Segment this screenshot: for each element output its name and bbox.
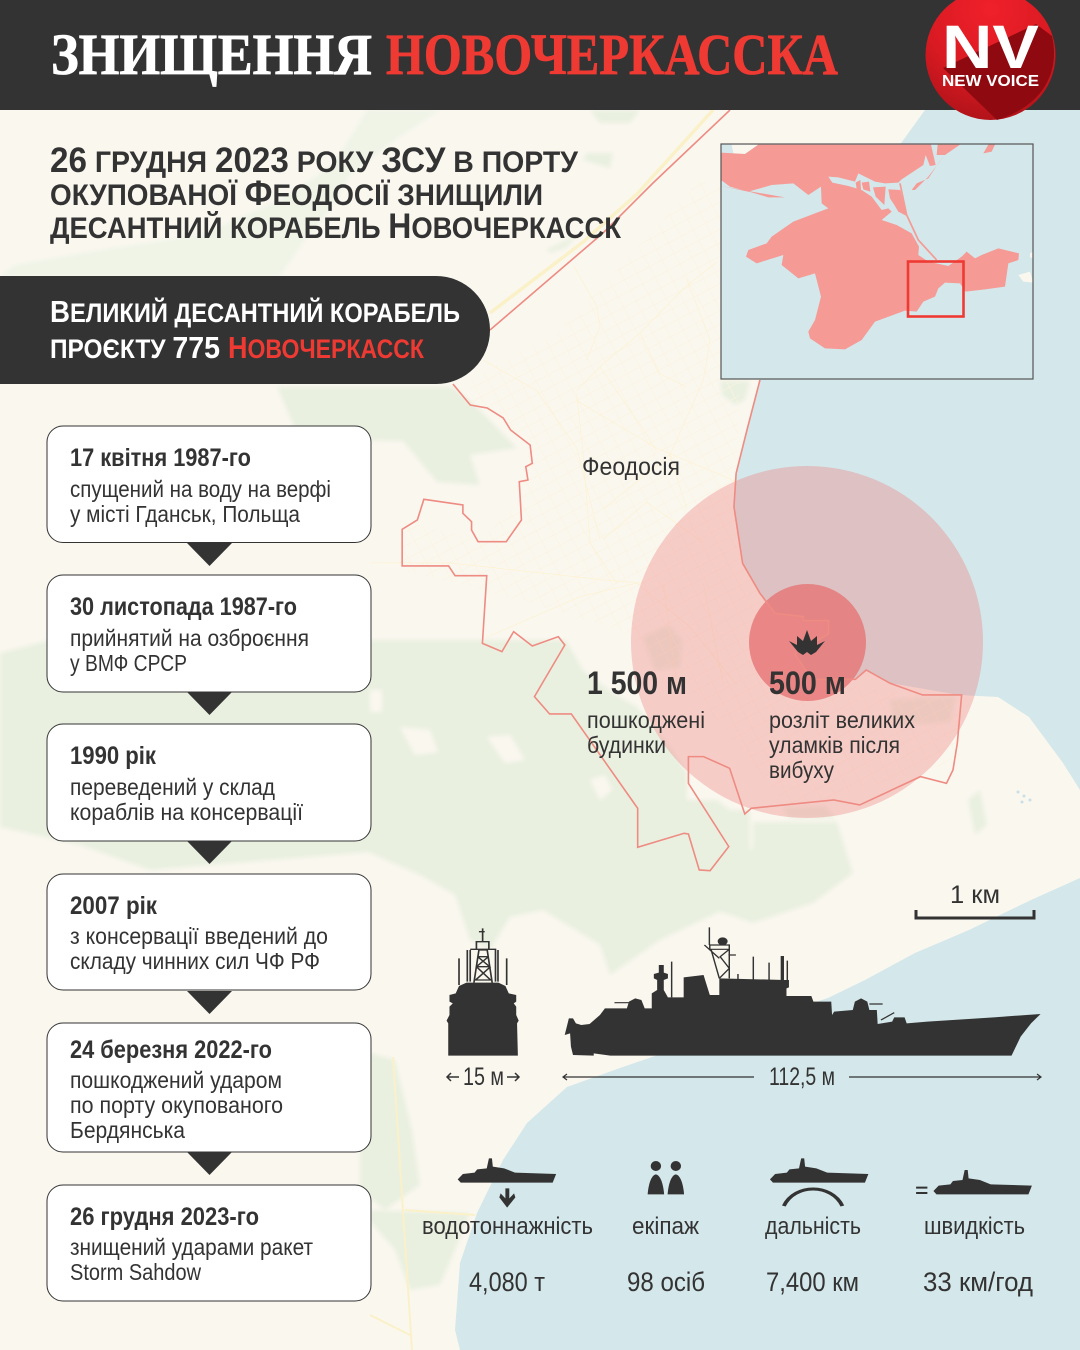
red border to north xyxy=(490,110,730,330)
timeline item 1: 17 квітня 1987-го xyxy=(70,444,251,472)
timeline item 2: прийнятий на озброєння xyxy=(70,625,309,651)
icon: ship with arc xyxy=(770,1158,868,1206)
stat: crew xyxy=(627,1161,705,1297)
stat: crew: 98 осіб xyxy=(627,1267,705,1297)
header bar xyxy=(0,0,1080,110)
sea: southern bay xyxy=(455,878,1080,1350)
timeline item 4: 2007 рік xyxy=(70,892,157,920)
intro text: 26 ГРУДНЯ 2023 РОКУ ЗСУ В ПОРТУ xyxy=(50,141,578,180)
stat: range: дальність xyxy=(765,1213,861,1240)
blast radius 1500 m xyxy=(631,466,983,818)
label 1500 m xyxy=(587,665,705,758)
NV logo: NEW VOICE xyxy=(942,73,1039,90)
dimension 112,5 m: 112,5 м xyxy=(769,1063,835,1091)
dimension 15 m: 15 м xyxy=(463,1063,504,1091)
timeline item 6 xyxy=(47,1185,371,1301)
city border xyxy=(402,380,962,871)
NV logo xyxy=(926,0,1056,120)
timeline item 2 xyxy=(47,575,371,715)
icon: two people xyxy=(648,1161,684,1194)
icon: ship with speed lines xyxy=(916,1170,1032,1194)
subtitle pill: ВЕЛИКИЙ ДЕСАНТНИЙ КОРАБЕЛЬ xyxy=(50,294,460,329)
title xyxy=(51,22,838,87)
subtitle pill xyxy=(0,276,490,384)
city grid xyxy=(400,180,960,810)
timeline item 1: спущений на воду на верфі xyxy=(70,476,331,502)
timeline item 6: знищений ударами ракет xyxy=(70,1234,313,1260)
timeline item 4 xyxy=(47,874,371,1014)
timeline item 3: кораблів на консервації xyxy=(70,799,304,825)
label 500 m xyxy=(769,665,915,783)
stat: speed: швидкість xyxy=(924,1213,1025,1240)
intro text: ОКУПОВАНОЇ ФЕОДОСІЇ ЗНИЩИЛИ xyxy=(50,174,543,213)
timeline item 2: 30 листопада 1987-го xyxy=(70,593,297,621)
stat: crew: екіпаж xyxy=(632,1213,699,1240)
intro text: ДЕСАНТНИЙ КОРАБЕЛЬ НОВОЧЕРКАССК xyxy=(50,207,622,246)
label 1500 m: пошкоджені xyxy=(587,707,705,733)
timeline item 3: переведений у склад xyxy=(70,774,276,800)
timeline item 1 xyxy=(47,426,371,566)
ship front view xyxy=(447,928,519,1056)
ship side view xyxy=(565,927,1041,1056)
label 500 m: розліт великих xyxy=(769,707,915,733)
city label: Феодосія xyxy=(582,453,680,481)
sea xyxy=(734,110,1080,790)
title: ЗНИЩЕННЯ xyxy=(51,22,372,87)
label 500 m: уламків після xyxy=(769,732,900,758)
stat: displacement: водотоннажність xyxy=(422,1213,593,1240)
title: НОВОЧЕРКАССКА xyxy=(386,22,838,87)
stat: speed: 33 км/год xyxy=(923,1267,1033,1297)
label 1500 m: 1 500 м xyxy=(587,665,687,701)
timeline item 5: пошкоджений ударом xyxy=(70,1067,282,1093)
locator square xyxy=(908,262,964,316)
timeline item 6: 26 грудня 2023-го xyxy=(70,1203,259,1231)
label 500 m: 500 м xyxy=(769,665,846,701)
explosion icon xyxy=(789,630,825,655)
blast radius 500 m xyxy=(749,584,866,701)
timeline item 5 xyxy=(47,1023,371,1175)
scale bar: 1 км xyxy=(950,881,1000,909)
label 1500 m: будинки xyxy=(587,732,666,758)
subtitle pill: ПРОЄКТУ 775 xyxy=(50,330,220,365)
timeline item 5: Бердянська xyxy=(70,1117,185,1143)
label 500 m: вибуху xyxy=(769,757,834,783)
NV logo: NV xyxy=(942,13,1039,81)
timeline item 5: по порту окупованого xyxy=(70,1092,283,1118)
dimension 112,5 m xyxy=(563,1063,1041,1091)
timeline item 2: у ВМФ СРСР xyxy=(70,650,187,676)
timeline item 6: Storm Sahdow xyxy=(70,1259,201,1285)
scale bar xyxy=(916,881,1034,918)
stat: speed xyxy=(916,1170,1033,1297)
timeline item 1: у місті Гданськ, Польща xyxy=(70,501,300,527)
timeline item 3: 1990 рік xyxy=(70,742,156,770)
intro text xyxy=(50,141,622,246)
stat: range xyxy=(765,1158,868,1297)
timeline item 4: з консервації введений до xyxy=(70,923,328,949)
stat: displacement: 4,080 т xyxy=(469,1267,545,1297)
timeline item 4: складу чинних сил ЧФ РФ xyxy=(70,948,320,974)
timeline item 3 xyxy=(47,724,371,864)
icon: ship with down arrow xyxy=(458,1158,556,1208)
subtitle pill: НОВОЧЕРКАССК xyxy=(228,330,425,365)
stat: range: 7,400 км xyxy=(766,1267,859,1297)
timeline item 5: 24 березня 2022-го xyxy=(70,1036,272,1064)
inset map of Crimea xyxy=(721,144,1033,379)
stat: displacement xyxy=(422,1158,593,1297)
